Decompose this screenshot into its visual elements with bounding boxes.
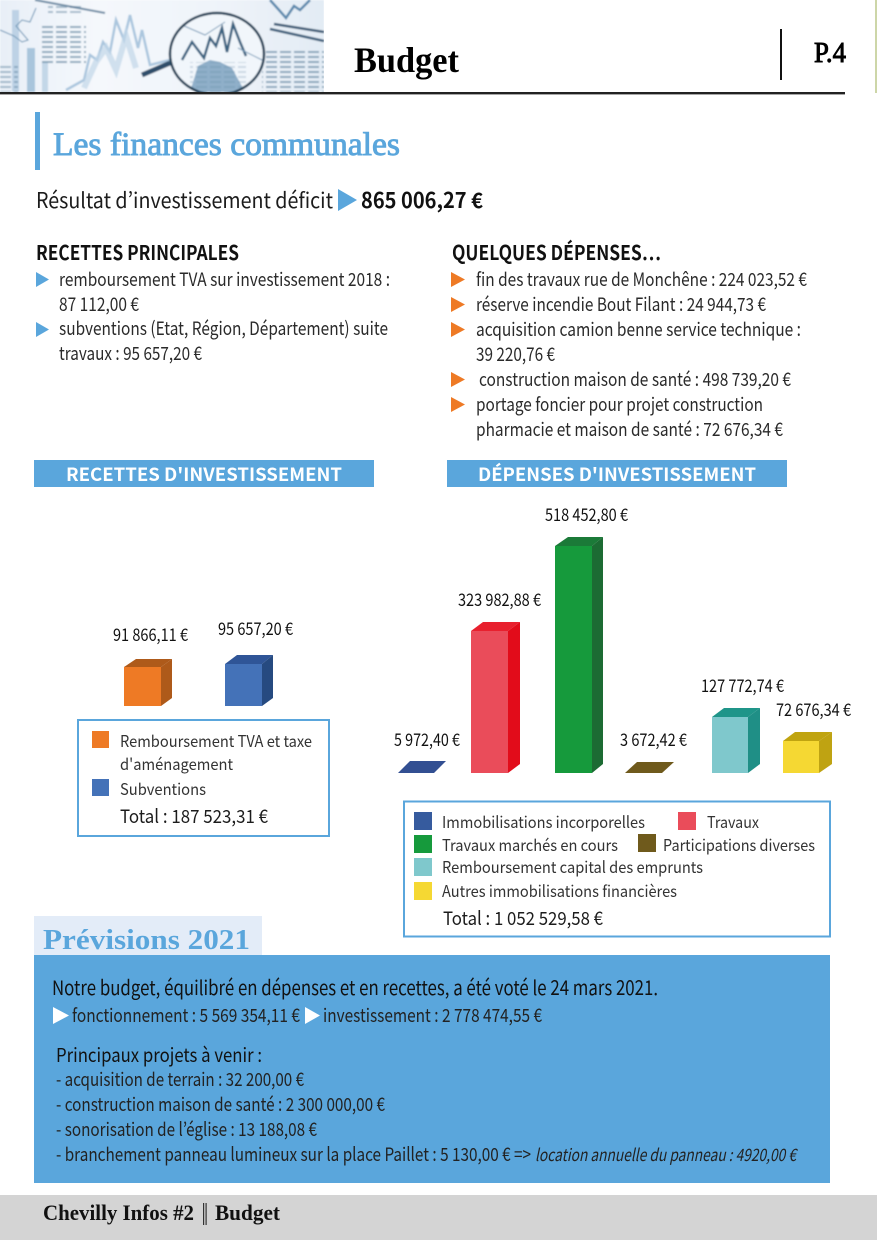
text block: recettes principales: RECETTES PRINCIPALES [36, 236, 239, 266]
legend: dépenses: Travaux marchés en cours [442, 832, 618, 856]
legend: dépenses: Total : 1 052 529,58 € [443, 905, 604, 931]
section heading: Les finances communales: Les finances communales [53, 127, 400, 163]
bar: participations diverses: 3 672,42 € [620, 726, 687, 751]
text block: quelques dépenses: fin des travaux rue de Monchêne : 224 023,52 € [476, 266, 808, 292]
text block: recettes principales: travaux : 95 657,20 € [59, 340, 203, 366]
text: principaux projets: - sonorisation de l’église : 13 188,08 € [56, 1116, 318, 1142]
text: principaux projets [56, 1041, 798, 1167]
investment result line: 865 006,27 € [361, 184, 483, 215]
text block: quelques dépenses: 39 220,76 € [476, 341, 556, 367]
text: principaux projets: Principaux projets à venir : [56, 1041, 262, 1068]
banner: dépenses d'investissement: DÉPENSES D'INVESTISSEMENT [478, 461, 756, 487]
banner: recettes d'investissement: RECETTES D'INVESTISSEMENT [66, 461, 342, 487]
footer: Chevilly Infos #2 [43, 1200, 194, 1225]
legend: dépenses: Immobilisations incorporelles [442, 809, 645, 833]
text: fonctionnement et investissement [53, 1002, 543, 1028]
bar: remboursement capital [701, 672, 784, 773]
text: principaux projets: - acquisition de terrain : 32 200,00 € [56, 1066, 305, 1092]
bar: remboursement TVA: 91 866,11 € [113, 621, 188, 646]
text block: quelques dépenses: acquisition camion benne service technique : [476, 316, 801, 342]
bar: travaux: 323 982,88 € [458, 586, 541, 611]
text block: recettes principales: 87 112,00 € [59, 291, 140, 317]
text: vote du budget: Notre budget, équilibré en dépenses et en recettes, a été voté le 24 mars 2021. [52, 972, 658, 1001]
text block: recettes principales: subventions (Etat, Région, Département) suite [59, 315, 388, 341]
legend: recettes: Remboursement TVA et taxe [120, 728, 312, 752]
text: fonctionnement et investissement: investissement : 2 778 474,55 € [323, 1002, 543, 1028]
header photo: magnifying glass over financial charts [0, 0, 324, 95]
investment result line: Résultat d’investissement déficit [36, 184, 333, 215]
bar chart: recettes [113, 615, 293, 706]
heading: prévisions 2021 [34, 916, 262, 956]
legend: recettes: Subventions [120, 776, 206, 800]
section heading: Les finances communales [35, 112, 400, 170]
heading: prévisions 2021: Prévisions 2021 [43, 924, 250, 956]
text block: quelques dépenses: QUELQUES DÉPENSES… [452, 236, 661, 266]
text block: quelques dépenses: réserve incendie Bout Filant : 24 944,73 € [476, 291, 767, 317]
legend: recettes [78, 720, 329, 836]
legend: dépenses: Participations diverses [663, 832, 815, 856]
legend: recettes: d'aménagement [120, 751, 233, 775]
page title: Budget [354, 40, 459, 80]
bar: subventions [218, 615, 293, 706]
bar: autres immobilisations financières: 72 676,34 € [776, 696, 851, 721]
bar: travaux [458, 586, 541, 773]
bar: participations diverses [620, 726, 687, 773]
text: principaux projets: - construction maison de santé : 2 300 000,00 € [56, 1091, 386, 1117]
text block: quelques dépenses: portage foncier pour projet construction [476, 391, 763, 417]
bar: remboursement TVA [113, 621, 188, 706]
text block: recettes principales: remboursement TVA sur investissement 2018 : [59, 266, 390, 292]
bar: travaux marchés en cours [545, 501, 628, 773]
bar: travaux marchés en cours: 518 452,80 € [545, 501, 628, 526]
bar: immobilisations incorporelles [394, 726, 460, 773]
legend: dépenses [404, 802, 830, 936]
text block: recettes principales [36, 236, 390, 366]
legend: dépenses: Autres immobilisations financières [442, 878, 677, 902]
text block: quelques dépenses [451, 236, 808, 442]
text block: quelques dépenses: pharmacie et maison de santé : 72 676,34 € [476, 416, 784, 442]
bar: remboursement capital: 127 772,74 € [701, 672, 784, 697]
text: principaux projets: - branchement panneau lumineux sur la place Paillet : 5 130,00 € => [56, 1141, 531, 1167]
text block: quelques dépenses: construction maison de santé : 498 739,20 € [479, 366, 792, 392]
bar: immobilisations incorporelles: 5 972,40 € [394, 726, 460, 751]
footer [0, 1195, 877, 1240]
text: fonctionnement et investissement: fonctionnement : 5 569 354,11 € [72, 1002, 301, 1028]
footer: Budget [215, 1200, 281, 1225]
page number: P.4 [814, 38, 846, 69]
legend: dépenses: Remboursement capital des emprunts [442, 854, 703, 878]
legend: dépenses: Travaux [707, 809, 759, 833]
bar chart: dépenses [394, 501, 851, 773]
bar: subventions: 95 657,20 € [218, 615, 293, 640]
legend: recettes: Total : 187 523,31 € [120, 803, 269, 829]
text: principaux projets: location annuelle du panneau : 4920,00 € [535, 1141, 798, 1166]
panel: prévisions [34, 955, 830, 1183]
bar: autres immobilisations financières [776, 696, 851, 773]
